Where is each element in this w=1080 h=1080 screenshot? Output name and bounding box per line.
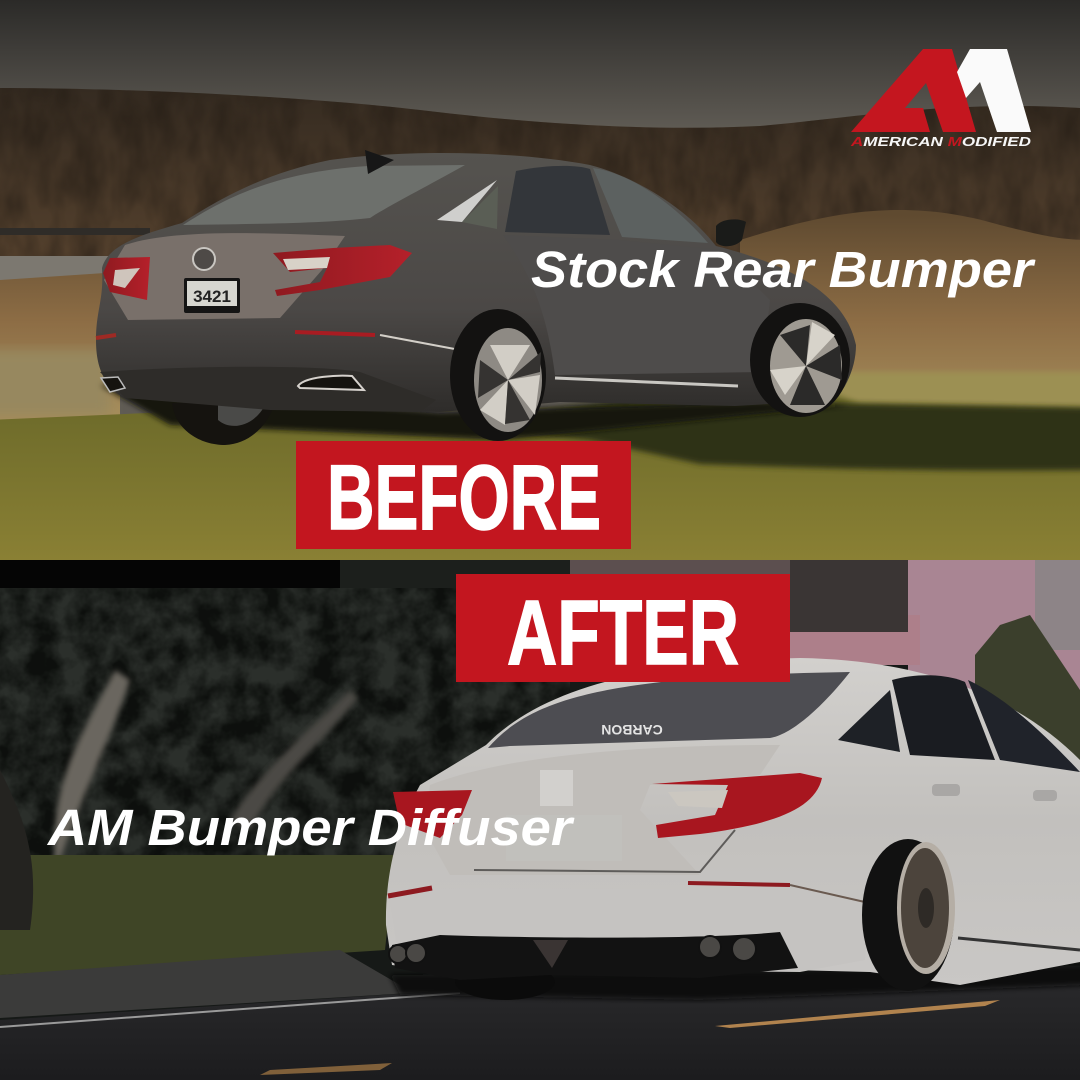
trunk lid shading <box>425 745 780 875</box>
rear wheel near <box>450 309 546 441</box>
trunk lid <box>104 233 345 320</box>
photo: after scene background <box>0 560 1080 1080</box>
front wheel <box>750 303 850 417</box>
car windows <box>183 165 708 243</box>
plate recess outline <box>474 830 735 872</box>
label: stock rear bumper: Stock Rear Bumper <box>531 241 1036 298</box>
wheel <box>862 839 955 991</box>
logo: American Modified <box>850 49 1031 149</box>
badge: after: AFTER <box>507 582 739 684</box>
under-car tire <box>455 964 555 1000</box>
side skirt <box>958 938 1080 950</box>
exhaust <box>298 376 364 390</box>
diffuser <box>392 932 798 980</box>
door panels <box>503 235 770 375</box>
car: white modified sedan with diffuser <box>386 658 1080 1000</box>
reflector lines <box>688 883 790 885</box>
bumper <box>388 888 870 972</box>
car: grey sedan rear view <box>96 150 856 445</box>
car windows <box>488 672 1080 772</box>
license plate: 3421 <box>193 287 231 306</box>
tail lights <box>393 773 822 838</box>
emblem <box>193 248 215 270</box>
label: AM bumper diffuser: AM Bumper Diffuser <box>46 799 575 856</box>
tail lights <box>103 245 412 300</box>
badge: before: BEFORE <box>327 447 601 549</box>
mirror <box>716 219 746 246</box>
door handles <box>932 784 1057 801</box>
exhaust tips <box>389 936 756 963</box>
logo: American Modified: A MERICAN M ODIFIED <box>850 135 1031 149</box>
license plate <box>184 278 240 313</box>
license plate <box>506 815 622 861</box>
centre brake light <box>533 940 568 968</box>
antenna <box>365 150 394 174</box>
photo: before scene background <box>0 0 1080 560</box>
lower bumper <box>100 367 436 412</box>
far rear wheel <box>172 403 275 445</box>
windshield decal: CARBON <box>601 722 663 738</box>
